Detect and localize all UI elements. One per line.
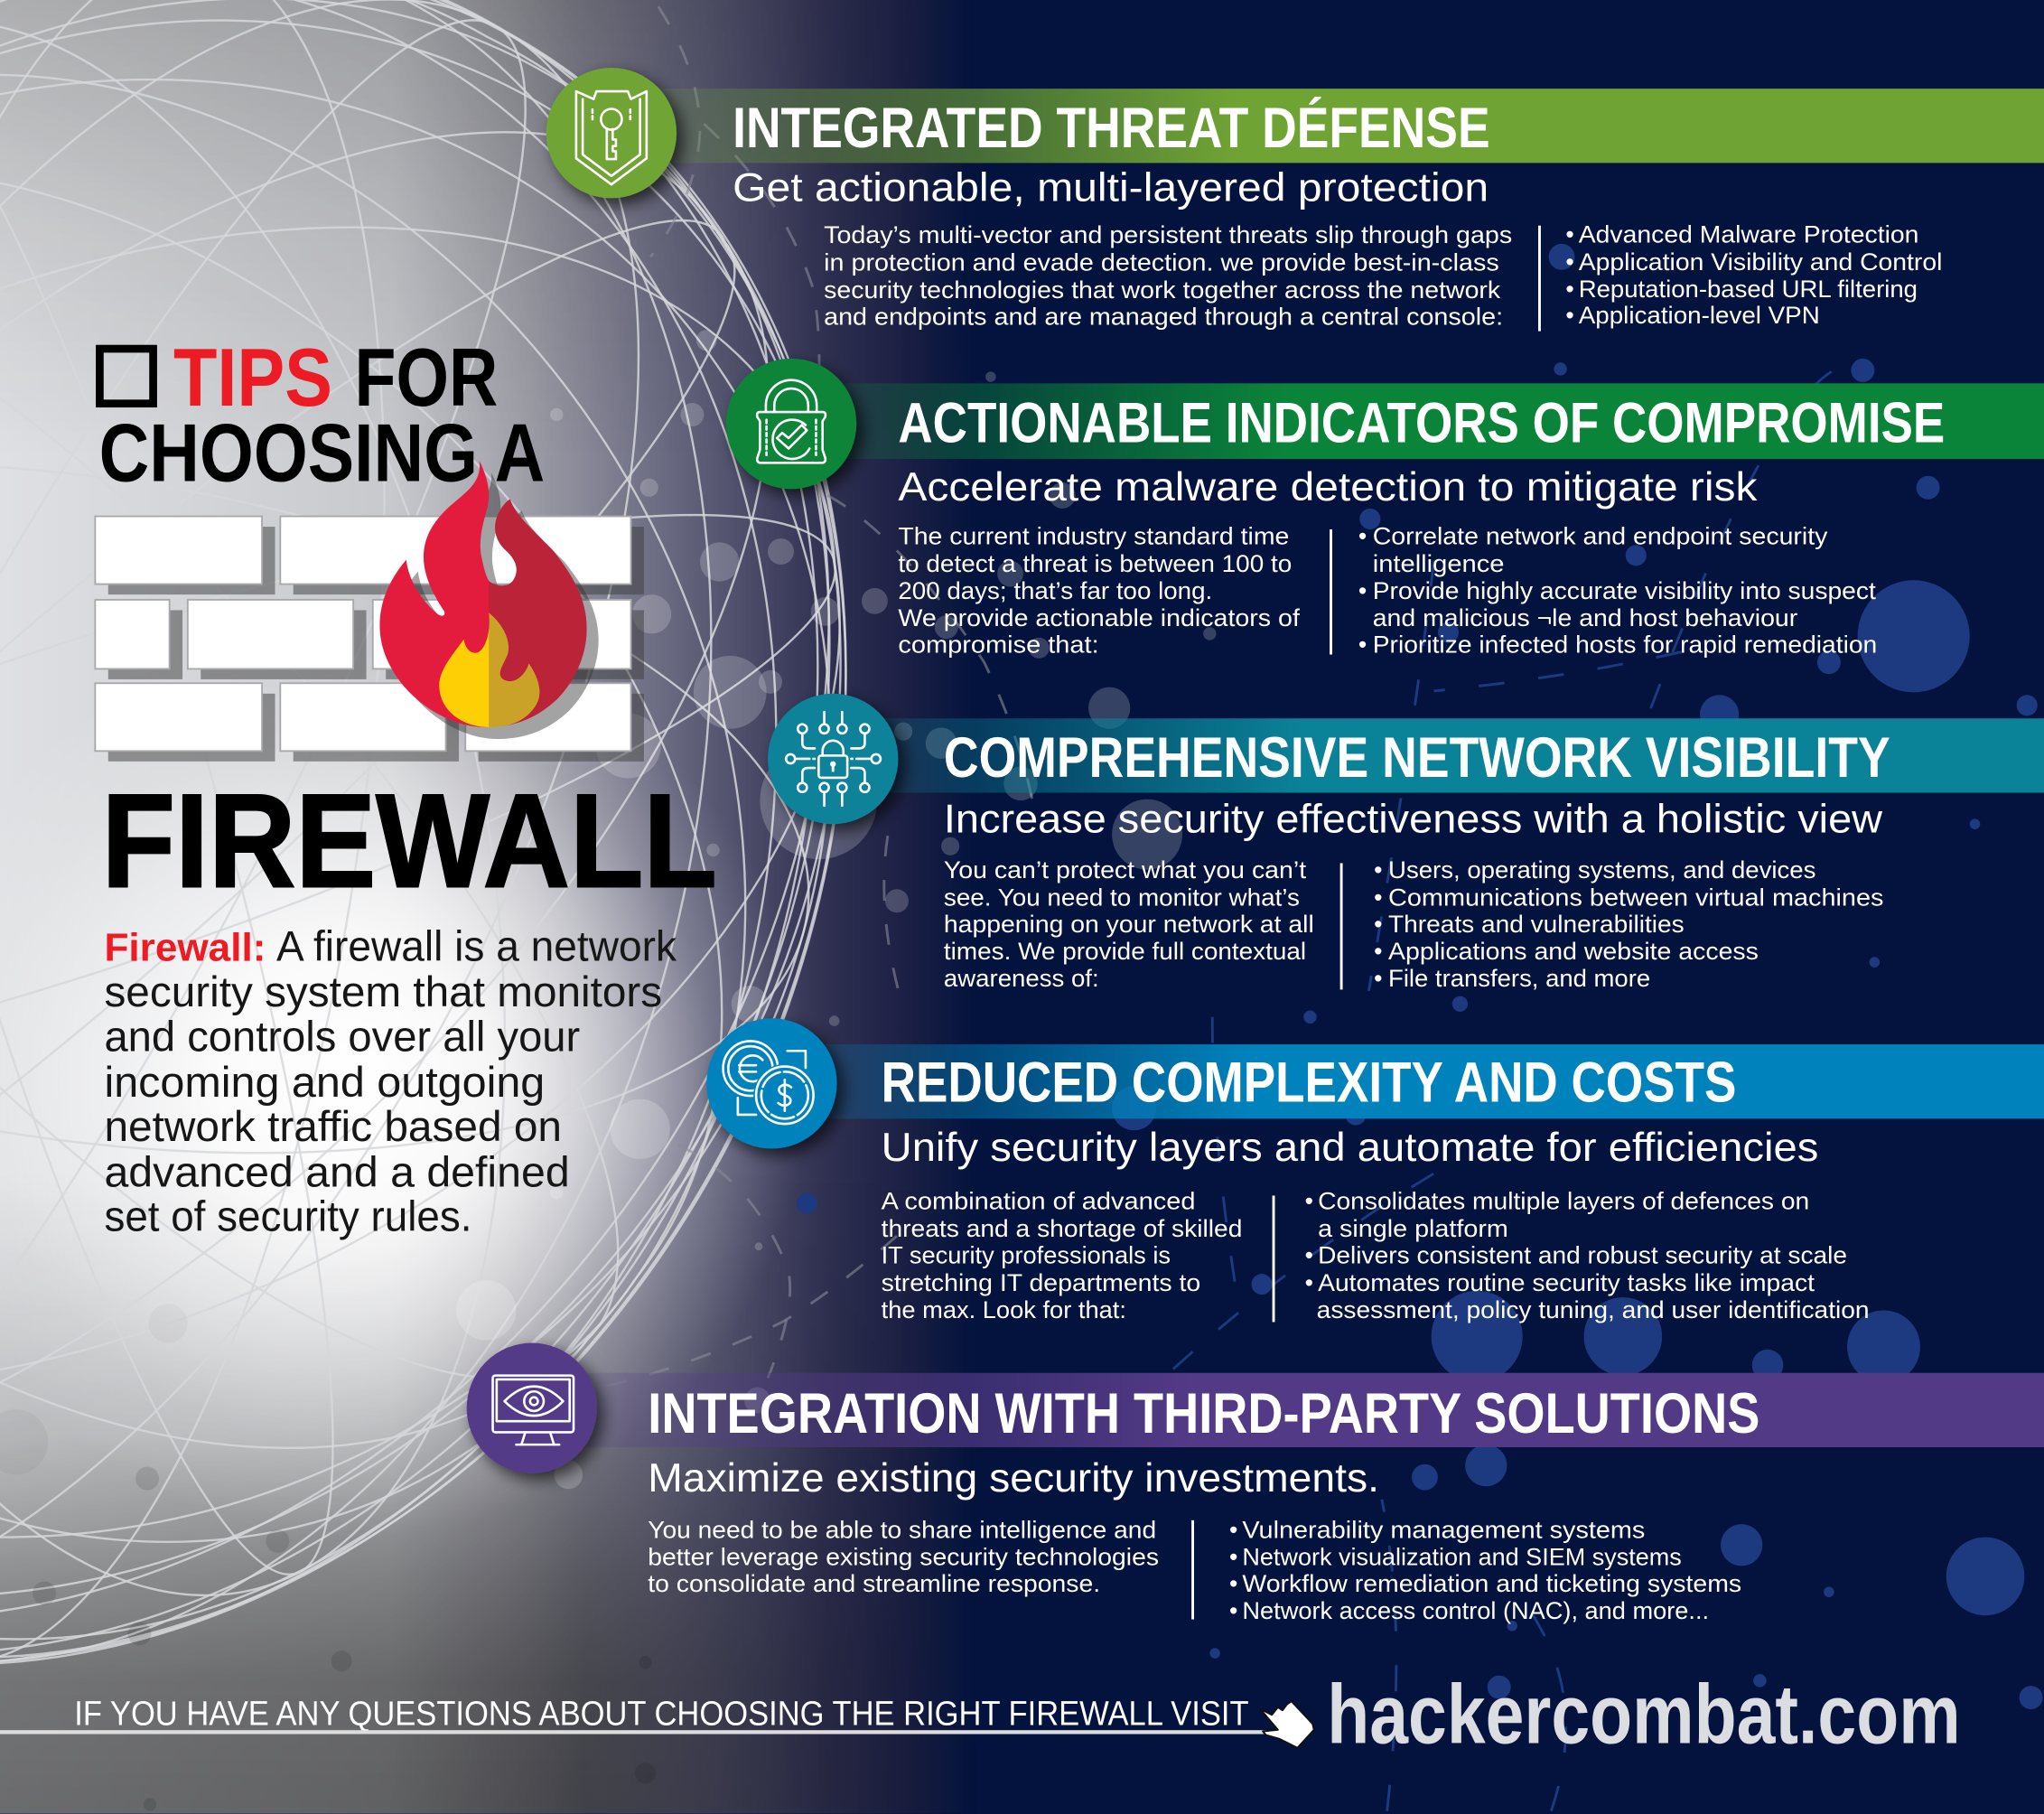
- background gradient: [0, 0, 953, 1814]
- bullet list: a single platform: [1318, 1215, 1508, 1242]
- body text: to consolidate and streamline response.: [648, 1570, 1100, 1597]
- body text: Today’s multi-vector and persistent threats slip through gaps: [824, 221, 1512, 248]
- icon: brick wall: [95, 517, 644, 762]
- body text: IT security professionals is: [882, 1242, 1171, 1269]
- bullet list: •: [1229, 1570, 1237, 1597]
- bullet list: •: [1565, 276, 1574, 303]
- bullet list: •: [1229, 1597, 1237, 1624]
- title: COMPREHENSIVE NETWORK VISIBILITY: [944, 726, 1890, 790]
- body text: see. You need to monitor what’s: [944, 884, 1300, 911]
- bullet list: Users, operating systems, and devices: [1388, 856, 1815, 884]
- bullet list: [1305, 1188, 1870, 1323]
- body text: compromise that:: [898, 631, 1099, 658]
- body text: and endpoints and are managed through a central console:: [824, 303, 1503, 330]
- body text: [882, 1188, 1242, 1323]
- bullet list: •: [1374, 884, 1383, 911]
- subtitle: Unify security layers and automate for efficiencies: [882, 1125, 1818, 1170]
- text block: firewall definition: set of security rules.: [104, 1192, 471, 1240]
- band: [833, 718, 2044, 792]
- bullet list: •: [1565, 302, 1574, 329]
- title: INTEGRATION WITH THIRD-PARTY SOLUTIONS: [648, 1382, 1759, 1445]
- bullet list: Delivers consistent and robust security at scale: [1318, 1242, 1847, 1269]
- background dots: blue: [797, 244, 2043, 1709]
- panel: integration with third-party solutions: [467, 1343, 2044, 1624]
- band: [611, 89, 2044, 163]
- bullet list: Vulnerability management systems: [1242, 1516, 1645, 1543]
- bullet list: •: [1305, 1269, 1313, 1296]
- text block: firewall definition: and controls over all your: [104, 1013, 580, 1061]
- body text: better leverage existing security technologies: [648, 1544, 1159, 1571]
- body text: [824, 221, 1512, 330]
- icon: coins: [706, 1018, 837, 1149]
- footer underline: [0, 1730, 1267, 1735]
- heading: tips for choosing a: [99, 332, 545, 500]
- bullet list: File transfers, and more: [1388, 965, 1650, 992]
- band: [791, 383, 2044, 459]
- bullet list: •: [1305, 1242, 1313, 1269]
- subtitle: Maximize existing security investments.: [648, 1455, 1379, 1501]
- panel: integrated threat defense: [546, 68, 2044, 332]
- bullet list: [1565, 220, 1942, 329]
- body text: [898, 523, 1301, 658]
- bullet list: Correlate network and endpoint security: [1373, 523, 1828, 550]
- body text: 200 days; that’s far too long.: [898, 577, 1212, 604]
- body text: You need to be able to share intelligence and: [648, 1516, 1156, 1543]
- heading: tips for choosing a: CHOOSING A: [99, 408, 545, 500]
- bullet list: •: [1374, 965, 1383, 992]
- bullet list: Network visualization and SIEM systems: [1242, 1544, 1682, 1571]
- bullet list: •: [1565, 248, 1574, 276]
- bullet list: Consolidates multiple layers of defences on: [1318, 1188, 1809, 1215]
- body text: awareness of:: [944, 965, 1099, 992]
- text block: firewall definition: A firewall is a network: [276, 923, 677, 971]
- body text: stretching IT departments to: [882, 1269, 1200, 1296]
- bullet list: [1374, 856, 1883, 992]
- body text: in protection and evade detection. we provide best-in-class: [824, 248, 1499, 276]
- text block: firewall definition: advanced and a defined: [104, 1148, 570, 1196]
- bullet list: [1358, 523, 1877, 658]
- title: INTEGRATED THREAT DÉFENSE: [733, 97, 1490, 160]
- bullet list: Network access control (NAC), and more...: [1242, 1597, 1709, 1624]
- dashed orbit lines on grey area: [456, 6, 1036, 1415]
- text block: firewall definition: Firewall:: [104, 927, 266, 970]
- bullet list: •: [1305, 1188, 1313, 1215]
- body text: the max. Look for that:: [882, 1296, 1126, 1323]
- band: [771, 1044, 2044, 1118]
- bullet list: •: [1374, 938, 1383, 965]
- body text: to detect a threat is between 100 to: [898, 550, 1292, 577]
- panel: reduced complexity and costs: [706, 1018, 2044, 1323]
- bullet list: Applications and website access: [1388, 938, 1759, 965]
- bullet list: Reputation-based URL filtering: [1579, 276, 1918, 303]
- body text: times. We provide full contextual: [944, 938, 1306, 965]
- icon: pointing hand: [1260, 1701, 1314, 1748]
- text block: firewall definition: [104, 923, 677, 1240]
- body text: threats and a shortage of skilled: [882, 1215, 1242, 1242]
- icon: shield with key: [546, 68, 677, 198]
- icon: flame: [379, 461, 599, 739]
- band: [532, 1373, 2044, 1447]
- bullet list: •: [1358, 631, 1367, 658]
- bullet list: •: [1565, 220, 1574, 248]
- body text: [944, 856, 1314, 992]
- footer text: IF YOU HAVE ANY QUESTIONS ABOUT CHOOSING THE RIGHT FIREWALL VISIT: [74, 1694, 1249, 1732]
- title: REDUCED COMPLEXITY AND COSTS: [882, 1052, 1736, 1115]
- bullet list: •: [1229, 1516, 1237, 1543]
- body text: You can’t protect what you can’t: [944, 856, 1307, 884]
- bullet list: Advanced Malware Protection: [1579, 220, 1918, 248]
- bullet list: Workflow remediation and ticketing systems: [1242, 1570, 1741, 1597]
- body text: We provide actionable indicators of: [898, 604, 1301, 631]
- heading: tips for choosing a: FOR: [355, 332, 498, 424]
- footer call to action: [0, 1668, 1961, 1762]
- globe wireframe lines: [0, 0, 845, 1665]
- bullet list: Application-level VPN: [1579, 302, 1820, 329]
- bullet list: •: [1229, 1544, 1237, 1571]
- bullet list: •: [1374, 911, 1383, 938]
- bullet list: [1229, 1516, 1741, 1624]
- body text: [648, 1516, 1159, 1597]
- panel: comprehensive network visibility: [768, 694, 2044, 992]
- bullet list: Threats and vulnerabilities: [1388, 911, 1685, 938]
- icon: monitor with eye: [467, 1343, 597, 1473]
- text block: firewall definition: incoming and outgoing: [104, 1059, 545, 1107]
- bullet list: Prioritize infected hosts for rapid remediation: [1373, 631, 1877, 658]
- bullet list: Automates routine security tasks like impact: [1318, 1269, 1815, 1296]
- subtitle: Accelerate malware detection to mitigate risk: [898, 464, 1758, 510]
- body text: happening on your network at all: [944, 911, 1314, 938]
- panel: actionable indicators of compromise: [726, 359, 2044, 658]
- icon: padlock with check: [726, 359, 856, 489]
- bullet list: assessment, policy tuning, and user identification: [1317, 1296, 1870, 1323]
- bullet list: and malicious ¬le and host behaviour: [1373, 604, 1797, 631]
- bullet list: •: [1358, 577, 1367, 604]
- body text: security technologies that work together across the network: [824, 276, 1501, 304]
- body text: A combination of advanced: [882, 1188, 1195, 1215]
- subtitle: Increase security effectiveness with a holistic view: [944, 797, 1883, 842]
- bullet list: •: [1358, 523, 1367, 550]
- background dots: grey: [456, 330, 1217, 1489]
- subtitle: Get actionable, multi-layered protection: [733, 164, 1489, 210]
- text block: firewall definition: network traffic based on: [104, 1103, 562, 1151]
- text block: firewall definition: security system that monitors: [104, 968, 662, 1016]
- bullet list: •: [1374, 856, 1383, 884]
- body text: The current industry standard time: [898, 523, 1289, 550]
- background dots: dark: [0, 1304, 656, 1811]
- bullet list: Communications between virtual machines: [1388, 884, 1883, 911]
- bullet list: Provide highly accurate visibility into suspect: [1373, 577, 1876, 604]
- heading: tips for choosing a: TIPS: [173, 332, 332, 424]
- bullet list: intelligence: [1373, 550, 1504, 577]
- icon: circuit padlock: [768, 694, 898, 824]
- heading: firewall: FIREWALL: [102, 767, 717, 915]
- bullet list: Application Visibility and Control: [1579, 248, 1942, 276]
- dashed orbit lines on navy area: [1173, 371, 1832, 1811]
